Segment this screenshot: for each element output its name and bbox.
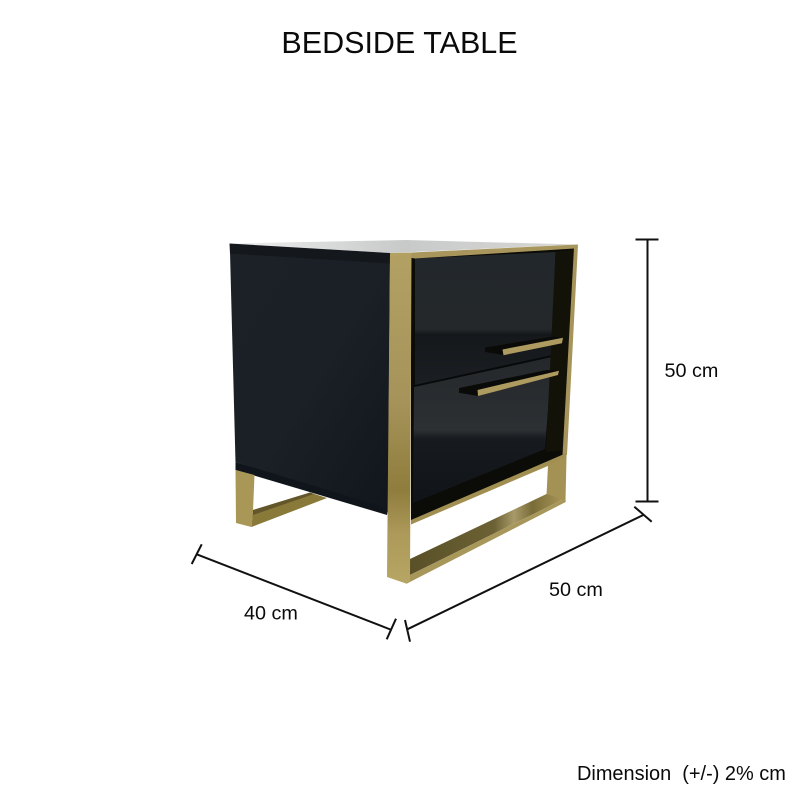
lower drawer front [413,357,552,503]
lower handle [459,370,559,396]
label: depth: 40 cm [244,602,298,624]
side panel [230,252,390,512]
label: height: 50 cm [664,360,718,382]
right interior post [546,249,575,452]
dimension: width [405,507,652,642]
side panel top band [230,244,390,264]
table top surface [229,240,578,253]
drawer gap line [414,356,552,386]
label: width: 50 cm [549,579,603,601]
top gold rail [412,244,578,258]
interior dark cavity [411,247,575,522]
lower bar outer edge [406,500,566,584]
right gold post [562,244,578,455]
upper handle [485,336,563,355]
title: BEDSIDE TABLE [281,26,518,60]
side panel base band [236,462,388,515]
upper drawer front [415,252,556,385]
bottom gold rail [411,453,566,524]
dimension: height [636,240,658,502]
left rear leg [236,470,327,527]
lower bar inner face [410,494,563,575]
bedside table illustration [229,240,578,584]
dimension: depth [192,544,396,639]
dimension note: Dimension (+/-) 2% cm [577,763,786,785]
right front leg [546,457,566,501]
front gold post [387,252,412,584]
